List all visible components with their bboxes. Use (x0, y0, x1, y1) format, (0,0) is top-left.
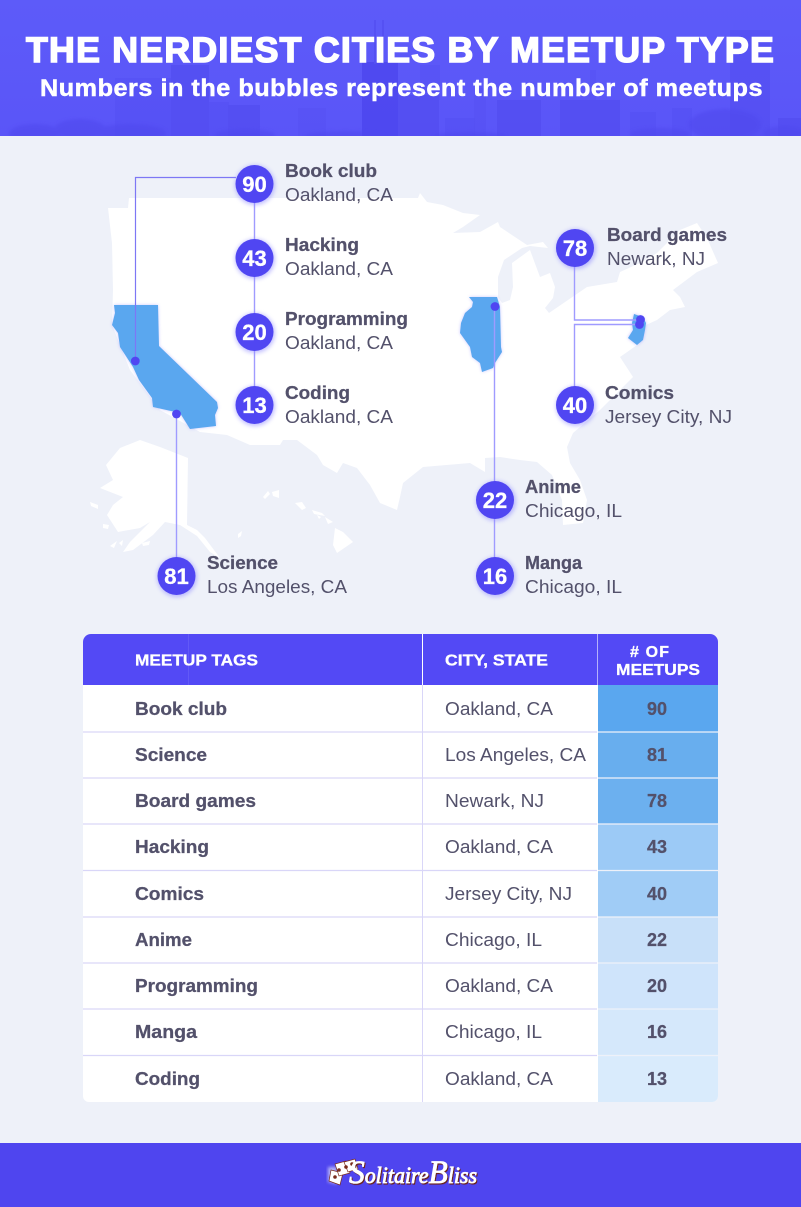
map of the United States (90, 193, 718, 558)
contiguous states silhouette (108, 193, 718, 525)
callout: manga: 16 (483, 564, 507, 589)
location dots (131, 302, 645, 418)
row: coding: Coding (135, 1069, 200, 1089)
callout: book club: Book club (285, 161, 377, 181)
subtitle: Numbers in the bubbles represent the number of meetups (40, 75, 763, 102)
icon: playing cards (328, 1159, 358, 1185)
callout: comics (556, 383, 732, 427)
row: programming: Programming (135, 976, 258, 996)
callout: manga (476, 553, 622, 597)
callout: science (157, 553, 347, 597)
callout: board games (556, 225, 727, 269)
row: programming: Oakland, CA (445, 976, 553, 996)
callout: coding: 13 (242, 393, 267, 418)
table header row: MEETUPS (616, 662, 700, 679)
row: science: Science (135, 745, 207, 765)
header banner (0, 0, 801, 144)
wordmark: SolitaireBliss (349, 1155, 477, 1191)
callout: coding: Oakland, CA (285, 407, 393, 427)
table header row: MEETUP TAGS (135, 652, 258, 670)
callout: programming: Programming (285, 309, 408, 329)
row and column rules (83, 685, 718, 1102)
row: coding: Oakland, CA (445, 1069, 553, 1089)
New Jersey (628, 314, 646, 345)
row: comics (135, 884, 667, 904)
callout: hacking: 43 (242, 246, 267, 271)
callout: programming (235, 309, 408, 353)
row: manga: Chicago, IL (445, 1022, 542, 1042)
row: board games: 78 (647, 791, 667, 811)
callout: anime: 22 (483, 488, 507, 513)
row: hacking (135, 837, 667, 857)
row: programming: 20 (647, 976, 667, 996)
callout: anime: Anime (525, 477, 581, 497)
Alaska (100, 440, 220, 558)
row: book club: 90 (647, 699, 667, 719)
table header row: # OF (630, 644, 669, 661)
row: book club: Oakland, CA (445, 699, 553, 719)
callout: manga: Chicago, IL (525, 577, 622, 597)
callout: programming: Oakland, CA (285, 333, 393, 353)
row: comics: 40 (647, 884, 667, 904)
callout: comics: 40 (563, 393, 587, 418)
row: book club: Book club (135, 699, 227, 719)
table header row: CITY, STATE (445, 652, 548, 670)
table header row (83, 634, 718, 685)
callout: anime: Chicago, IL (525, 501, 622, 521)
footer bar (0, 1143, 801, 1207)
table (83, 634, 718, 1102)
callout: book club: Oakland, CA (285, 185, 393, 205)
row: coding: 13 (647, 1069, 667, 1089)
callout: book club: 90 (242, 172, 267, 197)
connector lines (136, 178, 640, 576)
callout: hacking (235, 235, 393, 279)
row: anime: Anime (135, 930, 192, 950)
skyline (172, 20, 398, 136)
row: manga: Manga (135, 1022, 198, 1042)
California (112, 305, 218, 429)
callout: programming: 20 (242, 320, 267, 345)
row: anime: 22 (647, 930, 667, 950)
callout: anime (476, 477, 622, 521)
row: comics: Comics (135, 884, 204, 904)
row: manga (135, 1022, 667, 1042)
row: hacking: Hacking (135, 837, 209, 857)
callout: board games: 78 (563, 236, 587, 261)
row: book club (135, 699, 667, 719)
callout: coding: Coding (285, 383, 350, 403)
row: science: 81 (647, 745, 667, 765)
row: manga: 16 (647, 1022, 667, 1042)
callout: science: Science (207, 553, 278, 573)
callout: book club (235, 161, 393, 205)
title: THE NERDIEST CITIES BY MEETUP TYPE (26, 31, 775, 70)
row: programming (135, 976, 667, 996)
row: coding (135, 1069, 667, 1089)
row: board games (135, 791, 667, 811)
callout: board games: Board games (607, 225, 727, 245)
heat-shaded value column (598, 685, 718, 1102)
row: science (135, 745, 667, 765)
Hawaii (238, 490, 353, 553)
Aleutian and Alaskan islands (90, 502, 150, 548)
row: science: Los Angeles, CA (445, 745, 586, 765)
row: board games: Newark, NJ (445, 791, 544, 811)
callout: comics: Comics (605, 383, 674, 403)
callout: science: 81 (164, 564, 189, 589)
callout: hacking: Hacking (285, 235, 359, 255)
callout: manga: Manga (525, 553, 583, 573)
Illinois (460, 297, 502, 372)
callout: coding (235, 383, 393, 427)
logo: Solitaire Bliss (328, 1155, 477, 1191)
row: hacking: 43 (647, 837, 667, 857)
row: hacking: Oakland, CA (445, 837, 553, 857)
trees (728, 111, 729, 112)
table body background (83, 685, 718, 1102)
callout: comics: Jersey City, NJ (605, 407, 732, 427)
callout: board games: Newark, NJ (607, 249, 705, 269)
row: anime: Chicago, IL (445, 930, 542, 950)
callout: science: Los Angeles, CA (207, 577, 347, 597)
row: anime (135, 930, 667, 950)
row: board games: Board games (135, 791, 256, 811)
callout: hacking: Oakland, CA (285, 259, 393, 279)
row: comics: Jersey City, NJ (445, 884, 572, 904)
